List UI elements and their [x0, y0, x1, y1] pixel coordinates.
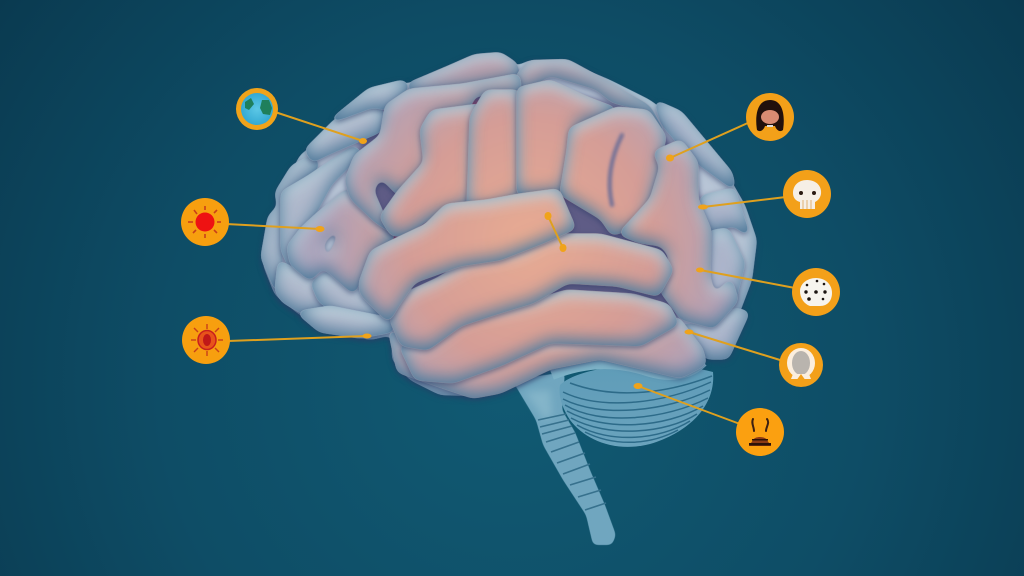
icon: red cell: [182, 316, 230, 364]
icon: red sun: [181, 198, 229, 246]
top arc gyri: [410, 55, 663, 133]
left outer folds: [263, 82, 407, 336]
temporal gyri: [362, 192, 703, 395]
icon: hands around head: [779, 343, 823, 387]
right outer folds: [657, 103, 747, 357]
cerebellum: [552, 362, 713, 447]
sulci underlay: [350, 85, 700, 330]
brain cerebrum: [263, 55, 757, 396]
connector lines: [226, 112, 795, 424]
silhouette: [263, 55, 757, 396]
icon: spotted skull: [792, 268, 840, 316]
left gyrus: [290, 192, 392, 290]
icon: face with dark hair: [746, 93, 794, 141]
icon: steaming pile: [736, 408, 784, 456]
frontal gyri: [348, 77, 735, 325]
icon: skull: [783, 170, 831, 218]
inner fold shading: [610, 135, 622, 205]
brain stem: [512, 372, 616, 545]
icon: earth: [236, 88, 278, 130]
collar band: [552, 362, 703, 375]
